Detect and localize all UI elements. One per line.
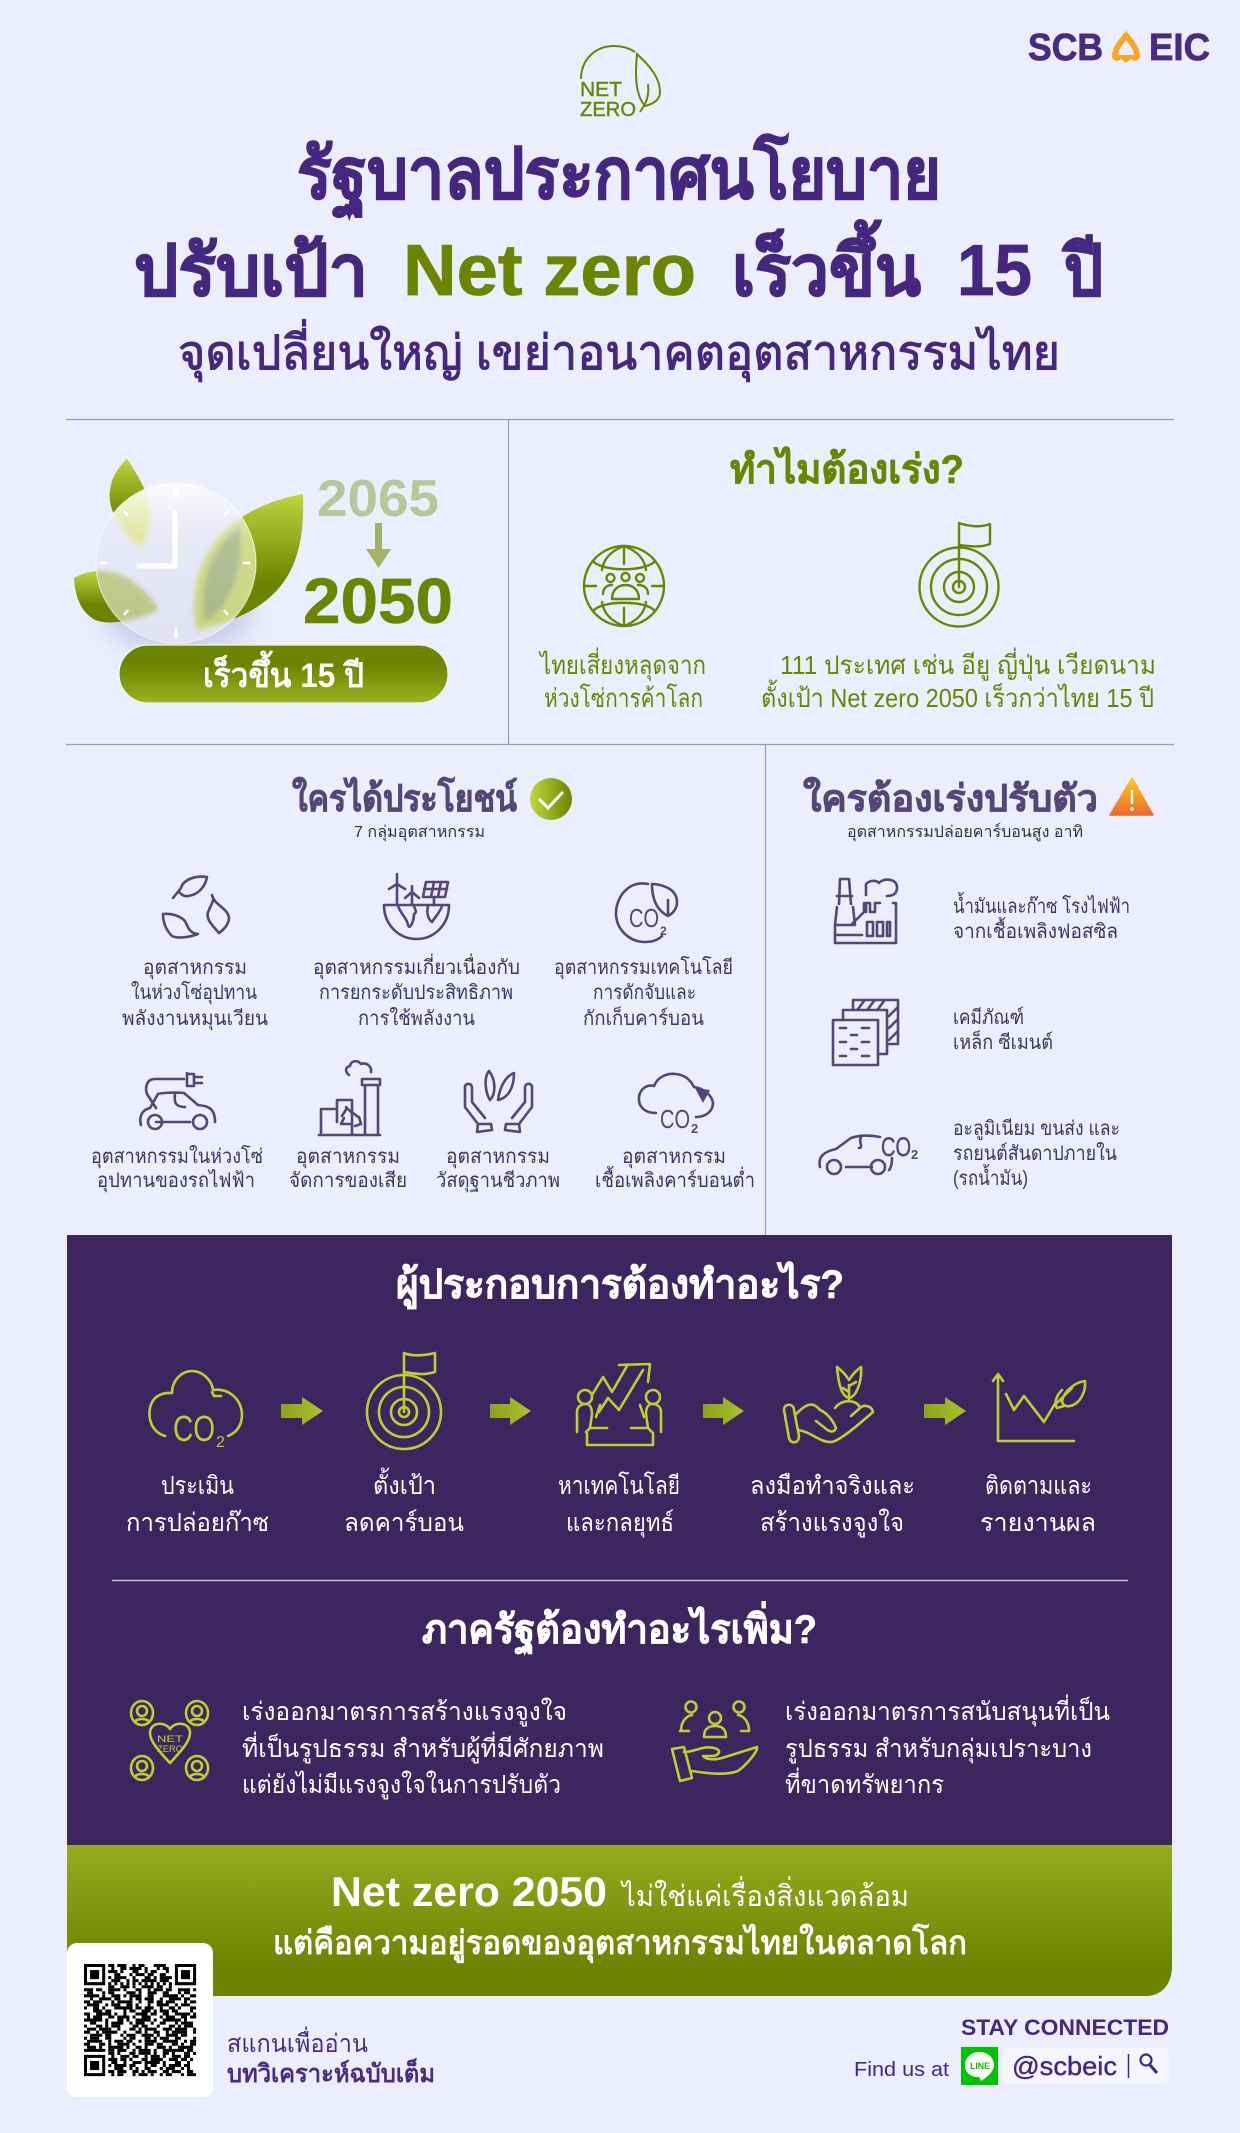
icon: check (530, 778, 572, 820)
item: aluminium transport (820, 1118, 1120, 1190)
text: scan to read (227, 2026, 435, 2088)
text: เชื้อเพลิงคาร์บอนต่ำ (595, 1166, 755, 1192)
subheading: อุตสาหกรรมปล่อยคาร์บอนสูง อาทิ (847, 822, 1083, 842)
title (134, 133, 1103, 382)
icon: heart and people: NET (157, 1734, 184, 1744)
text: 111 countries (761, 647, 1156, 713)
text: อุตสาหกรรมเทคโนโลยี (554, 956, 733, 980)
icon: cloud CO2: CO (173, 1408, 215, 1449)
text: (รถน้ำมัน) (953, 1164, 1028, 1190)
arrow (490, 1397, 531, 1425)
text: อุตสาหกรรม (296, 1146, 400, 1169)
panel: why hurry (538, 446, 1156, 713)
logo: SCB EIC: SCB (1028, 27, 1103, 69)
footer: stay connected (854, 2015, 1169, 2085)
text: scan to read: สแกนเพื่ออ่าน (227, 2026, 368, 2058)
text: 2065: 2065 (317, 470, 439, 528)
title: เร็วขึ้น (732, 219, 921, 310)
logo: Net Zero leaf: ZERO (580, 99, 636, 121)
title: Net zero (403, 231, 696, 311)
text (242, 1697, 604, 1800)
text: การปล่อยก๊าซ (126, 1509, 269, 1537)
text: สร้างแรงจูงใจ (760, 1508, 904, 1538)
panel: who benefits (91, 776, 755, 1193)
title: จุดเปลี่ยนใหญ่ เขย่าอนาคตอุตสาหกรรมไทย (178, 319, 1060, 382)
text: ลดคาร์บอน (344, 1509, 464, 1537)
title: รัฐบาลประกาศนโยบาย (297, 133, 941, 219)
step: assess emissions (126, 1371, 269, 1537)
icon: car CO2 (820, 1132, 918, 1174)
icon: factory recycle (319, 1061, 380, 1135)
text: อุปทานของรถไฟฟ้า (97, 1169, 255, 1193)
panel: green conclusion band: ไม่ใช่แค่เรื่องสิ่งแวดล้อม (620, 1876, 909, 1913)
step: set target (344, 1353, 464, 1537)
logo: SCB EIC: EIC (1149, 27, 1210, 69)
text: scan to read: บทวิเคราะห์ฉบับเต็ม (227, 2058, 435, 2088)
QR code card (67, 1943, 213, 2097)
item: bio-based materials (436, 1071, 560, 1193)
icon: electric car plug (140, 1073, 215, 1125)
text: 111 countries: 111 ประเทศ เช่น อียู ญี่ปุ่น เวียดนาม (780, 647, 1156, 681)
icon: wind solar globe (384, 874, 449, 939)
text (91, 1145, 263, 1193)
text: รถยนต์สันดาปภายใน (953, 1142, 1117, 1165)
text: การใช้พลังงาน (358, 1007, 475, 1030)
logo: SCB EIC (1028, 27, 1210, 69)
heading: ใครได้ประโยชน์ (292, 776, 517, 819)
icon: cloud CO2: CO (660, 1104, 690, 1134)
icon: cloud CO2 (639, 1074, 713, 1136)
step: take action (750, 1367, 915, 1538)
pill: faster 15 years: เร็วขึ้น 15 ปี (203, 650, 364, 695)
icon: car CO2: CO (881, 1132, 911, 1162)
item: EV supply chain (91, 1073, 263, 1193)
text: พลังงานหมุนเวียน (122, 1008, 268, 1031)
icon: cloud CO2: 2 (216, 1434, 225, 1451)
panel: who must adapt (803, 776, 1153, 1190)
text (313, 953, 520, 1030)
panel: green conclusion band: Net zero 2050 (331, 1868, 607, 1915)
text: ตั้งเป้า (373, 1467, 436, 1500)
text: วัสดุฐานชีวภาพ (436, 1170, 560, 1193)
text: เคมีภัณฑ์ (953, 1006, 1024, 1029)
icon: globe people (584, 546, 664, 626)
title: 15 (957, 231, 1032, 311)
text (980, 1472, 1096, 1537)
icon: leaves and glass clock (74, 459, 303, 654)
panel: green conclusion band: แต่คือความอยู่รอดของอุตสาหกรรมไทยในตลาดโลก (273, 1923, 967, 1964)
text: 111 countries: ตั้งเป้า Net zero 2050 เร็วกว่าไทย 15 ปี (761, 679, 1154, 713)
step: monitor and report (980, 1374, 1096, 1537)
icon: hand holding plant (784, 1367, 873, 1442)
item: carbon capture (554, 883, 733, 1030)
logo: Net Zero leaf (580, 46, 660, 121)
text (953, 1006, 1053, 1054)
item: incentives (131, 1697, 604, 1800)
icon: chart with leaf (993, 1374, 1085, 1441)
text (289, 1146, 407, 1192)
text (126, 1472, 269, 1537)
text (953, 892, 1130, 943)
text: จากเชื้อเพลิงฟอสซิล (953, 917, 1118, 943)
heading: ใครต้องเร่งปรับตัว (803, 776, 1098, 819)
text: อุตสาหกรรม (446, 1146, 550, 1169)
text (953, 1118, 1120, 1190)
text: 2050: 2050 (303, 565, 453, 637)
icon: warning (1110, 778, 1153, 815)
handle box: @scbeic (1012, 2051, 1117, 2081)
panel: purple actions (67, 1235, 1172, 1846)
text: ติดตามและ (985, 1472, 1092, 1500)
text: รายงานผล (980, 1509, 1096, 1537)
text (436, 1146, 560, 1193)
text (122, 957, 268, 1031)
icon: LINE: LINE (970, 2061, 990, 2071)
handle box (1003, 2048, 1169, 2084)
icon: hands with leaves (465, 1071, 532, 1132)
text: Thailand risk: ห่วงโซ่การค้าโลก (544, 683, 703, 713)
panel: clock 2065 to 2050 (74, 459, 453, 703)
text: Thailand risk (538, 647, 706, 713)
text: หาเทคโนโลยี (558, 1471, 680, 1500)
arrow (924, 1397, 966, 1425)
text: อุตสาหกรรมเกี่ยวเนื่องกับ (313, 953, 520, 980)
text (785, 1694, 1110, 1799)
logo: Net Zero leaf: NET (580, 79, 622, 101)
icon: heart and people (131, 1701, 208, 1780)
icon: CO2 leaf circle (616, 883, 677, 942)
text: อุตสาหกรรม (622, 1146, 726, 1169)
text: รูปธรรม สำหรับกลุ่มเปราะบาง (785, 1735, 1092, 1764)
item: waste management (289, 1061, 407, 1192)
icon: CO2 leaf circle: 2 (660, 924, 667, 938)
text (750, 1472, 915, 1538)
text: เหล็ก ซีเมนต์ (953, 1029, 1053, 1054)
text: Thailand risk: ไทยเสี่ยงหลุดจาก (538, 647, 706, 681)
arrow (703, 1397, 744, 1425)
text: ที่เป็นรูปธรรม สำหรับผู้ที่มีศักยภาพ (242, 1731, 604, 1764)
text: อะลูมิเนียม ขนส่ง และ (953, 1118, 1120, 1141)
text: อุตสาหกรรม (143, 957, 247, 980)
text (595, 1146, 755, 1192)
text: กักเก็บคาร์บอน (583, 1005, 704, 1030)
footer: stay connected: STAY CONNECTED (961, 2015, 1169, 2040)
item: energy efficiency (313, 874, 520, 1030)
text (554, 956, 733, 1030)
heading: what operators must do: ผู้ประกอบการต้องทำอะไร? (396, 1261, 844, 1309)
icon: people and rising chart (577, 1364, 661, 1445)
arrow (281, 1397, 323, 1425)
text (344, 1467, 464, 1537)
icon: cloud CO2 (150, 1371, 242, 1451)
text: และกลยุทธ์ (566, 1509, 674, 1538)
text: การยกระดับประสิทธิภาพ (319, 982, 513, 1004)
icon: car CO2: 2 (911, 1147, 918, 1162)
footer: stay connected: Find us at (854, 2059, 949, 2081)
icon: car wheels (148, 1115, 207, 1129)
text: เร่งออกมาตรการสร้างแรงจูงใจ (242, 1697, 567, 1727)
icon: material layers (833, 1000, 898, 1065)
title: ปรับเป้า (134, 232, 368, 310)
text: ลงมือทำจริงและ (750, 1472, 915, 1500)
item: chemicals steel cement (833, 1000, 1053, 1065)
text: แต่ยังไม่มีแรงจูงใจในการปรับตัว (242, 1770, 561, 1800)
icon: heart and people: ZERO (157, 1744, 183, 1754)
text: ประเมิน (161, 1472, 234, 1500)
icon: LINE (961, 2047, 998, 2085)
icon: target flag (367, 1353, 441, 1449)
text: ในห่วงโซ่อุปทาน (131, 981, 257, 1005)
icon: target flag (920, 523, 998, 626)
icon: factory (835, 879, 897, 943)
icon: recycled leaves (163, 877, 229, 937)
step: find technology (558, 1364, 680, 1538)
heading: what government must do: ภาครัฐต้องทำอะไรเพิ่ม? (422, 1601, 817, 1656)
text: น้ำมันและก๊าซ โรงไฟฟ้า (953, 892, 1130, 918)
text: จัดการของเสีย (289, 1170, 407, 1192)
item: oil and gas (835, 879, 1130, 943)
text (558, 1471, 680, 1538)
icon: cloud CO2: 2 (691, 1121, 698, 1136)
icon: CO2 leaf circle: CO (629, 903, 659, 933)
text: การดักจับและ (593, 982, 696, 1004)
icon: hand and people (672, 1702, 757, 1781)
text: เร่งออกมาตรการสนับสนุนที่เป็น (785, 1694, 1110, 1727)
subheading: 7 กลุ่มอุตสาหกรรม (354, 824, 485, 842)
title: ปี (1062, 232, 1103, 310)
text: อุตสาหกรรมในห่วงโซ่ (91, 1145, 263, 1169)
panel: green conclusion band (67, 1845, 1172, 1996)
text: ที่ขาดทรัพยากร (785, 1767, 944, 1799)
pill: faster 15 years (119, 645, 448, 703)
item: renewable supply chain (122, 877, 268, 1031)
arrow: down (366, 523, 391, 568)
heading: ทำไมต้องเร่ง? (730, 446, 964, 492)
item: support measures (672, 1694, 1110, 1799)
item: low carbon fuel (595, 1074, 755, 1192)
